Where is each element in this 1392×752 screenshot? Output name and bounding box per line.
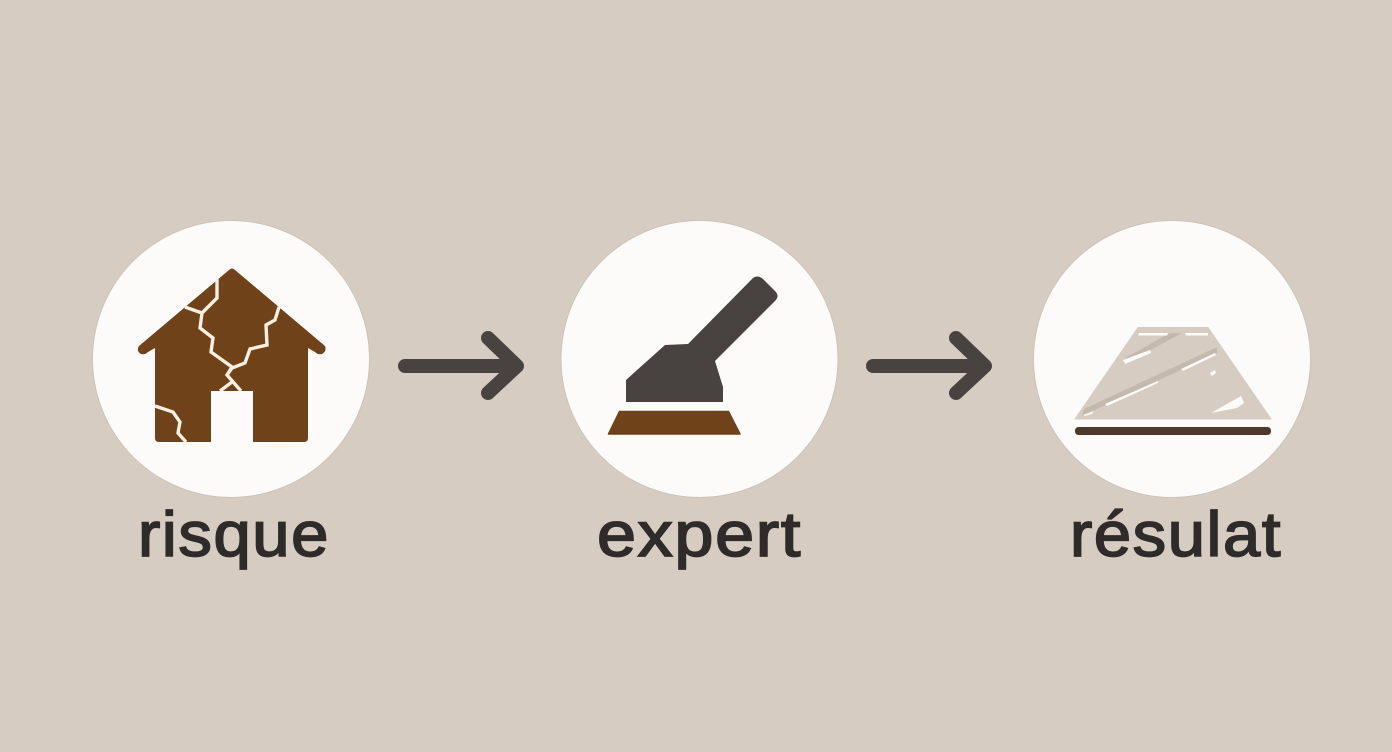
step 3: résulat [1034, 220, 1310, 570]
step 1: risque [92, 220, 370, 570]
icon: scraper tool [608, 276, 778, 434]
circle: résulat background [1034, 220, 1310, 498]
circle: risque background [92, 220, 370, 498]
icon: glass pane on a bar [1075, 328, 1271, 435]
label: risque: risque [138, 500, 330, 570]
arrow: risque to expert [405, 338, 517, 393]
step 2: expert [561, 220, 838, 570]
circle: expert background [561, 220, 838, 498]
icon: cracked house [138, 268, 326, 442]
label: résulat: résulat [1070, 500, 1282, 570]
arrow: expert to résulat [873, 338, 985, 393]
label: expert: expert [597, 500, 802, 570]
